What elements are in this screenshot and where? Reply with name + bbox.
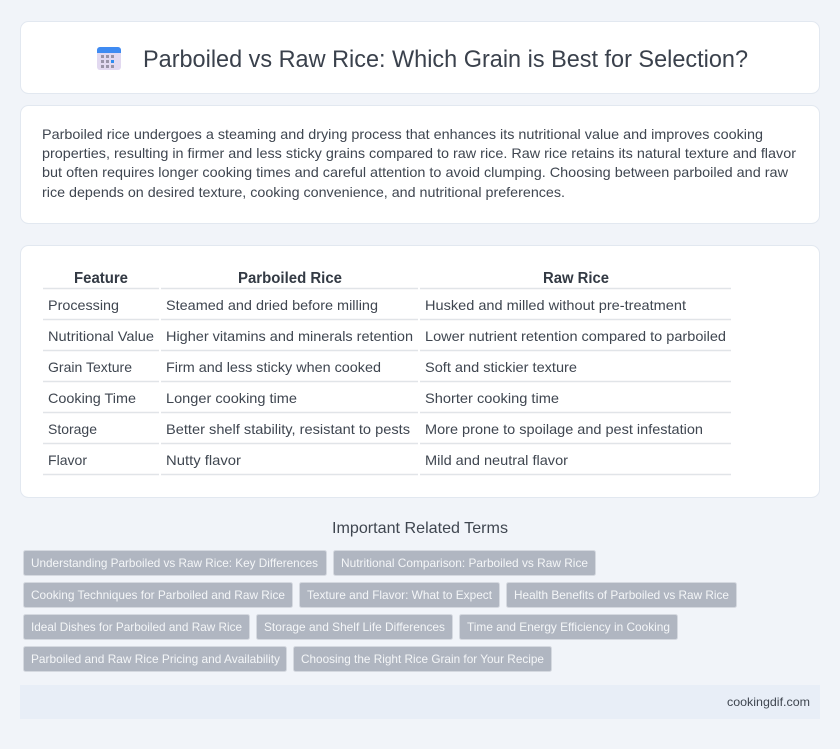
row: cooking time: Longer cooking time: [166, 390, 297, 406]
table header: Feature: [74, 270, 128, 287]
row: nutritional value: Higher vitamins and minerals retention: [166, 328, 413, 344]
footer bar: [20, 685, 820, 719]
description text: properties, resulting in firmer and less sticky grains compared to raw rice. Raw rice retains its natural texture and flavor: [42, 145, 796, 161]
tag: Nutritional Comparison: Parboiled vs Raw Rice: [341, 556, 588, 570]
row: processing: Processing: [48, 297, 119, 313]
tag: [24, 614, 250, 640]
row: cooking time: Cooking Time: [48, 390, 136, 406]
row: processing: Steamed and dried before milling: [166, 297, 378, 313]
heading: important related terms: Important Related Terms: [332, 520, 508, 537]
row: grain texture: Grain Texture: [48, 359, 132, 375]
tag: [24, 582, 292, 608]
table header: [74, 270, 609, 287]
row: processing: Husked and milled without pre-treatment: [425, 297, 686, 313]
row: storage: [48, 421, 703, 437]
row: cooking time: Shorter cooking time: [425, 390, 559, 406]
table header: Parboiled Rice: [238, 270, 342, 287]
tag: [24, 646, 286, 672]
tag: [294, 646, 552, 672]
icon: calendar: [97, 47, 121, 70]
row: storage: Storage: [48, 421, 97, 437]
tag: Parboiled and Raw Rice Pricing and Availability: [31, 652, 280, 666]
tag: Time and Energy Efficiency in Cooking: [467, 620, 670, 634]
tag: Texture and Flavor: What to Expect: [307, 588, 493, 602]
tag: [506, 582, 736, 608]
tag: Storage and Shelf Life Differences: [264, 620, 445, 634]
panel: header: [20, 22, 820, 94]
row: processing: [48, 297, 686, 313]
tag: [460, 614, 678, 640]
tag: [24, 550, 326, 576]
row: nutritional value: Lower nutrient retention compared to parboiled: [425, 328, 726, 344]
row: flavor: Flavor: [48, 452, 87, 468]
related term tags: [24, 550, 736, 672]
tag: Understanding Parboiled vs Raw Rice: Key Differences: [31, 556, 318, 570]
row: cooking time: [48, 390, 559, 406]
footer domain: cookingdif.com: [727, 695, 810, 709]
tag: Health Benefits of Parboiled vs Raw Rice: [514, 588, 729, 602]
tag: [300, 582, 500, 608]
row: flavor: [48, 452, 568, 468]
title: Parboiled vs Raw Rice: Which Grain is Best for Selection?: [143, 46, 748, 73]
row: flavor: Mild and neutral flavor: [425, 452, 568, 468]
row: grain texture: Soft and stickier texture: [425, 359, 577, 375]
panel: comparison table: [20, 246, 820, 498]
row: flavor: Nutty flavor: [166, 452, 241, 468]
description text: Parboiled rice undergoes a steaming and drying process that enhances its nutritional value and improves cooking: [42, 126, 763, 142]
row: grain texture: Firm and less sticky when cooked: [166, 359, 381, 375]
description text: [42, 126, 796, 200]
tag: Cooking Techniques for Parboiled and Raw Rice: [31, 588, 285, 602]
tag: [256, 614, 452, 640]
row: nutritional value: Nutritional Value: [48, 328, 154, 344]
tag: [334, 550, 596, 576]
row: storage: Better shelf stability, resistant to pests: [166, 421, 410, 437]
table header: Raw Rice: [543, 270, 609, 287]
row: nutritional value: [48, 328, 726, 344]
row: storage: More prone to spoilage and pest infestation: [425, 421, 703, 437]
tag: Ideal Dishes for Parboiled and Raw Rice: [31, 620, 242, 634]
description text: rice depends on desired texture, cooking convenience, and nutritional preferences.: [42, 184, 565, 200]
row: grain texture: [48, 359, 577, 375]
panel: description: [20, 106, 820, 224]
description text: but often requires longer cooking times and careful attention to avoid clumping. Choosing between parboiled and raw: [42, 164, 789, 180]
tag: Choosing the Right Rice Grain for Your Recipe: [301, 652, 544, 666]
